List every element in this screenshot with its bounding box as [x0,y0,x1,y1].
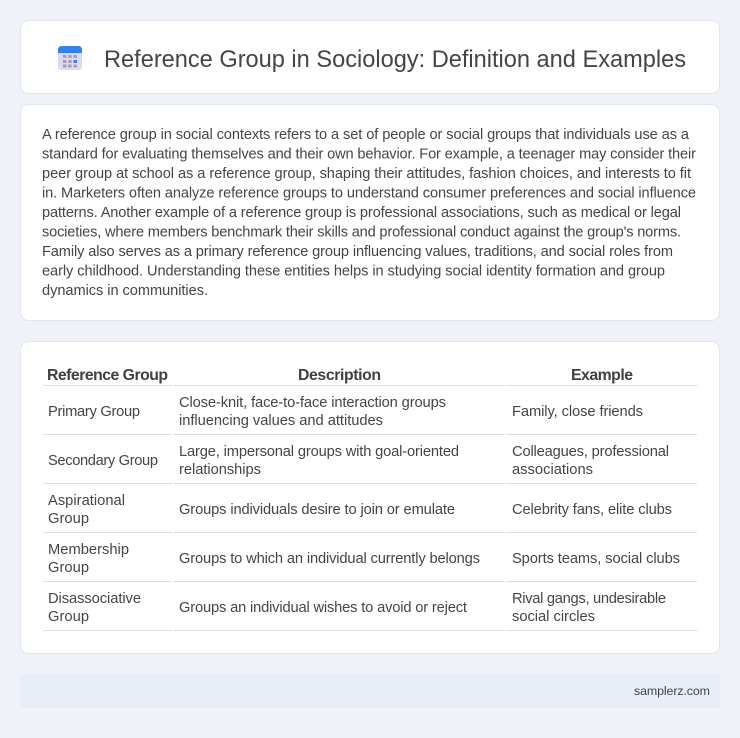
text block: definition: early childhood. Understanding these entities helps in studying social identity formation and group [42,264,665,280]
row: secondary group [48,444,669,478]
row: disassociative group: Disassociative [48,591,141,607]
row: primary group: influencing values and attitudes [179,413,383,429]
text block: definition: in. Marketers often analyze reference groups to understand consumer preferences and social influence [42,186,696,202]
row: secondary group: Large, impersonal groups with goal-oriented [179,444,459,460]
row: aspirational group: Groups individuals desire to join or emulate [179,502,455,518]
row: aspirational group: Celebrity fans, elite clubs [512,502,672,518]
row: membership group: Membership [48,542,129,558]
row: secondary group: relationships [179,462,261,478]
table header [47,367,633,384]
title: Reference Group in Sociology: Definition and Examples [104,47,686,73]
table header: Example [571,367,633,384]
row: secondary group: Colleagues, professional [512,444,669,460]
text block: definition: peer group at school as a reference group, shaping their attitudes, fashion choices, and interests to fit [42,166,691,182]
text block: definition: Family also serves as a primary reference group influencing values, traditions, and social roles from [42,244,673,260]
text block: definition: patterns. Another example of a reference group is professional associations, such as medical or legal [42,205,681,221]
row: membership group [48,542,680,576]
footer bar [20,674,720,708]
row: aspirational group: Group [48,511,89,527]
footer source text: samplerz.com [634,684,710,698]
row: aspirational group: Aspirational [48,493,125,509]
row: secondary group: Secondary Group [48,453,158,469]
row: disassociative group [48,591,666,625]
row: disassociative group: Group [48,609,89,625]
row: primary group: Close-knit, face-to-face interaction groups [179,395,446,411]
row: membership group: Sports teams, social clubs [512,551,680,567]
text block: definition: standard for evaluating themselves and their own behavior. For example, a teenager may consider their [42,146,696,162]
row: disassociative group: social circles [512,609,595,625]
text block: definition [42,127,696,299]
row: disassociative group: Groups an individual wishes to avoid or reject [179,600,467,616]
row: primary group: Primary Group [48,404,140,420]
panel: table [20,342,720,654]
panel: header [20,20,720,94]
row: primary group [48,395,643,429]
text block: definition: dynamics in communities. [42,283,208,299]
panel: intro paragraph [20,104,720,320]
row: membership group: Groups to which an individual currently belongs [179,551,480,567]
row: aspirational group [48,493,672,527]
row: secondary group: associations [512,462,593,478]
text block: definition: A reference group in social contexts refers to a set of people or social groups that individuals use as a [42,127,690,143]
row: primary group: Family, close friends [512,404,643,420]
table header: Description [298,367,381,384]
table header: Reference Group [47,367,168,384]
icon: calendar [58,46,82,70]
text block: definition: societies, where members benchmark their skills and professional conduct against the group's norms. [42,224,681,240]
row: disassociative group: Rival gangs, undesirable [512,591,666,607]
row: membership group: Group [48,560,89,576]
